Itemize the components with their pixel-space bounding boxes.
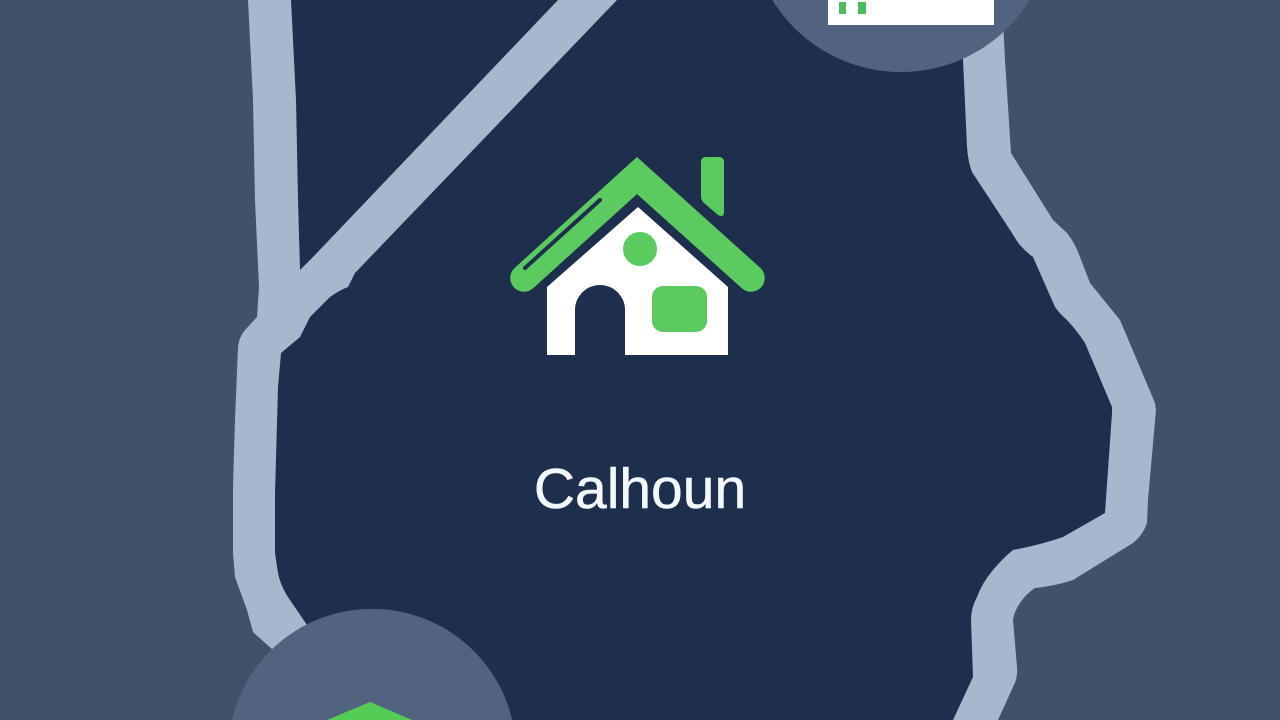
square window [652, 286, 707, 332]
door [575, 285, 625, 355]
roof [524, 176, 751, 278]
neighbouring marker: top right [772, 0, 1030, 72]
round attic window [623, 232, 657, 266]
roof highlight [525, 200, 600, 268]
county shape with border [233, 0, 1156, 720]
house body [547, 207, 728, 355]
neighbouring marker: bottom left [232, 609, 512, 720]
icon: house [524, 157, 751, 355]
county label: Calhoun [534, 457, 746, 521]
chimney [701, 157, 724, 216]
